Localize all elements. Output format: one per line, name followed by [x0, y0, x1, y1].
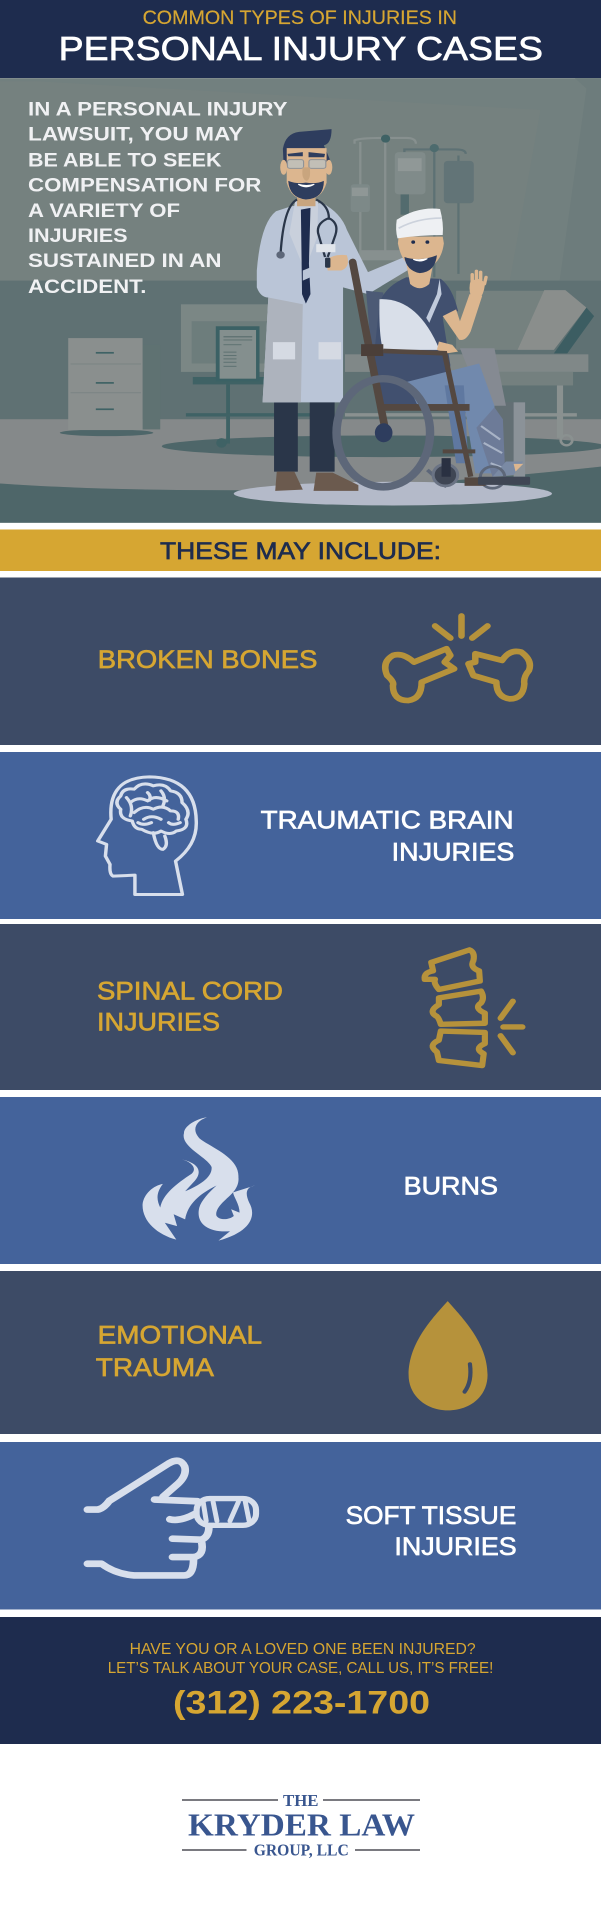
footer call to action: [0, 1617, 601, 1744]
notice board and table: [181, 304, 310, 448]
hero text: ACCIDENT.: [28, 276, 146, 298]
logo: the kryder law group: GROUP, LLC: [254, 1840, 349, 1859]
cta line two: LET’S TALK ABOUT YOUR CASE, CALL US, IT’S FREE!: [108, 1660, 493, 1677]
panel: emotional trauma: [0, 1271, 601, 1434]
label: broken bones: BROKEN BONES: [98, 647, 317, 674]
iv stands: [351, 135, 474, 277]
hospital bed: [345, 290, 594, 477]
icon: bandaged hand: [87, 1461, 256, 1575]
hero text: IN A PERSONAL INJURY: [28, 99, 288, 121]
hero text: SUSTAINED IN AN: [28, 250, 222, 272]
icon: flame: [143, 1117, 255, 1241]
wheelchair: [337, 262, 530, 488]
icon: head with brain: [98, 777, 196, 895]
phone number: (312) 223-1700: [173, 1685, 430, 1721]
hero text: LAWSUIT, YOU MAY: [28, 124, 243, 146]
hero illustration panel: [0, 78, 601, 523]
logo: the kryder law group: KRYDER LAW: [188, 1807, 415, 1843]
hero text: A VARIETY OF: [28, 200, 180, 222]
label line two: TRAUMA: [96, 1355, 214, 1382]
hospital room background: [0, 78, 601, 523]
hero text: BE ABLE TO SEEK: [28, 150, 222, 172]
panel: broken bones: [0, 578, 601, 745]
cta line one: HAVE YOU OR A LOVED ONE BEEN INJURED?: [130, 1641, 476, 1658]
label: emotional trauma: EMOTIONAL: [98, 1323, 262, 1350]
logo: the kryder law group: [182, 1791, 420, 1859]
panel: spinal cord injuries: [0, 924, 601, 1090]
label line two: INJURIES: [392, 840, 514, 866]
hero text: INJURIES: [28, 225, 128, 247]
shadow under figures: [234, 482, 552, 505]
hero text: COMPENSATION FOR: [28, 174, 261, 196]
icon: spine: [425, 950, 522, 1066]
logo: the kryder law group: THE: [283, 1791, 318, 1810]
header kicker: COMMON TYPES OF INJURIES IN: [143, 7, 457, 29]
doctor: [257, 129, 410, 491]
icon: broken bone: [385, 616, 530, 701]
label: spinal cord injuries: SPINAL CORD: [97, 979, 283, 1006]
panel: burns: [0, 1097, 601, 1264]
section band: these may include: [0, 530, 601, 571]
section band: these may include: THESE MAY INCLUDE:: [160, 538, 441, 565]
label line two: INJURIES: [97, 1010, 220, 1037]
panel: soft tissue injuries: [0, 1442, 601, 1610]
header panel: [0, 0, 601, 78]
label: burns: BURNS: [404, 1173, 498, 1200]
cabinet: [60, 338, 160, 436]
patient in wheelchair: [366, 208, 523, 477]
title: PERSONAL INJURY CASES: [59, 31, 543, 68]
label line two: INJURIES: [394, 1534, 517, 1561]
panel: traumatic brain injuries: [0, 752, 601, 919]
label: traumatic brain injuries: TRAUMATIC BRAIN: [261, 808, 514, 835]
hero text: [28, 99, 288, 298]
icon: tear drop: [409, 1301, 488, 1410]
stethoscope: [281, 199, 336, 257]
label: soft tissue injuries: SOFT TISSUE: [346, 1503, 516, 1530]
